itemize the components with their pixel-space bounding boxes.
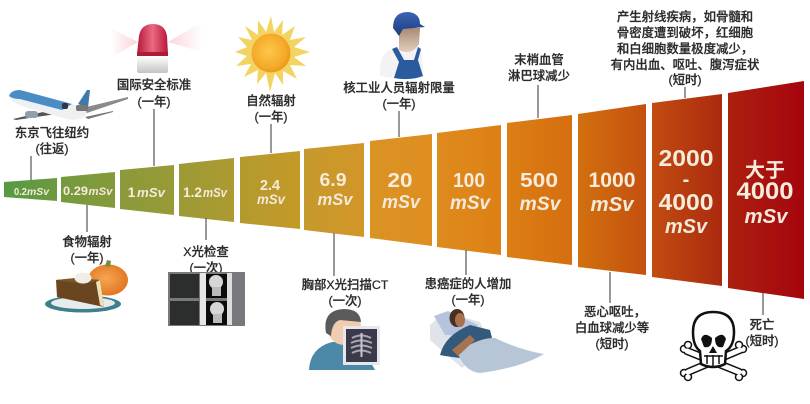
bar: 6.9 mSv: 6.9 <box>320 170 346 190</box>
label: nausea and white cell decrease: (短时) <box>595 337 629 351</box>
label: death: 死亡 <box>750 317 774 332</box>
label: radiation sickness description: 产生射线疾病，如骨髓和 <box>617 9 753 24</box>
label: nausea and white cell decrease <box>575 272 649 351</box>
bar: over 4000 mSv <box>728 81 804 299</box>
icon: X-ray lightbox <box>168 272 245 326</box>
bar: over 4000 mSv: mSv <box>744 206 789 228</box>
bar: 1.2 mSv: mSv <box>203 186 228 200</box>
label: chest CT scan <box>302 233 389 308</box>
label: peripheral blood lymphocyte decrease: 末梢血管 <box>514 52 564 67</box>
label: Tokyo to New York flight: (往返) <box>35 141 69 156</box>
bar: 0.29 mSv <box>61 172 115 208</box>
bar: 1000 mSv <box>578 104 646 275</box>
bar: 2000-4000 mSv: 2000 <box>658 145 714 171</box>
icon: sun <box>235 16 310 92</box>
label: radiation sickness description: (短时) <box>668 73 702 87</box>
label: nuclear worker limit <box>343 80 455 137</box>
label: death: (短时) <box>745 334 779 348</box>
bar: 20 mSv: 20 <box>388 170 412 192</box>
bar: 6.9 mSv: mSv <box>318 191 353 209</box>
bar: over 4000 mSv: 大于 <box>745 159 785 182</box>
bar: 2.4 mSv <box>240 151 300 229</box>
bar: 1000 mSv: 1000 <box>588 169 636 192</box>
label: death <box>745 293 779 348</box>
bar: 2000-4000 mSv: 4000 <box>658 189 714 215</box>
bar: 500 mSv: 500 <box>520 170 558 192</box>
label: Tokyo to New York flight: 东京飞往纽约 <box>15 125 89 140</box>
icon: red alarm beacon <box>110 22 202 73</box>
dose scale bars <box>4 81 804 299</box>
bar: 500 mSv <box>507 115 572 265</box>
bar: 100 mSv: 100 <box>453 170 485 192</box>
label: cancer patients increase: 患癌症的人增加 <box>425 276 511 291</box>
bar: 2.4 mSv: mSv <box>257 191 286 207</box>
bar: 0.2 mSv: mSv <box>27 187 50 198</box>
label: X-ray examination: X光检查 <box>183 244 229 259</box>
bar: 500 mSv: mSv <box>520 194 562 215</box>
icon: patient in bed <box>430 309 544 373</box>
bar: 2000-4000 mSv: mSv <box>665 216 709 238</box>
label: chest CT scan: (一次) <box>328 293 362 308</box>
bar: 1 mSv: mSv <box>137 185 166 200</box>
bar: 1 mSv: 1 <box>128 184 136 200</box>
bar: 1.2 mSv: 1.2 <box>183 184 202 200</box>
label: nuclear worker limit: (一年) <box>382 97 416 111</box>
label: natural radiation: 自然辐射 <box>246 93 296 108</box>
bar: 2.4 mSv: 2.4 <box>260 178 280 194</box>
bar: 20 mSv <box>370 134 432 246</box>
bar: 0.2 mSv <box>4 178 57 201</box>
label: radiation sickness description: 骨密度遭到破坏，红细胞 <box>617 25 753 40</box>
icon: nuclear worker <box>380 12 425 79</box>
bar: 100 mSv: mSv <box>450 193 491 214</box>
bar: 20 mSv: mSv <box>382 192 421 212</box>
label: X-ray examination: (一次) <box>189 260 223 275</box>
bar: over 4000 mSv: 4000 <box>736 178 794 205</box>
label: radiation sickness description <box>611 9 760 98</box>
bar: 2000-4000 mSv <box>652 94 722 286</box>
label: cancer patients increase <box>425 250 511 307</box>
label: cancer patients increase: (一年) <box>451 293 485 307</box>
label: international safety standard: (一年) <box>137 95 171 109</box>
label: nausea and white cell decrease: 恶心呕吐， <box>584 305 646 319</box>
label: nuclear worker limit: 核工业人员辐射限量 <box>343 80 455 95</box>
icon: skull and crossbones <box>680 312 746 380</box>
bar: 1 mSv <box>120 165 174 215</box>
label: radiation sickness description: 和白细胞数量极度减少， <box>617 41 753 56</box>
icon: airplane <box>9 90 128 120</box>
bar: 1000 mSv: mSv <box>590 194 635 216</box>
label: international safety standard <box>117 77 191 166</box>
bar: 0.29 mSv: 0.29 <box>63 184 88 198</box>
label: radiation sickness description: 有内出血、呕吐、腹泻症状 <box>611 57 760 72</box>
icon: person with chest X-ray <box>309 309 380 370</box>
label: food radiation: 食物辐射 <box>62 234 112 249</box>
bar: 6.9 mSv <box>304 143 364 237</box>
label: chest CT scan: 胸部X光扫描CT <box>302 277 389 292</box>
bar: 0.2 mSv: 0.2 <box>14 186 27 198</box>
label: Tokyo to New York flight <box>15 125 89 180</box>
label: peripheral blood lymphocyte decrease <box>508 52 570 118</box>
bar: 100 mSv <box>437 125 501 255</box>
bar: 0.29 mSv: mSv <box>88 186 113 198</box>
label: food radiation: (一年) <box>70 251 104 265</box>
label: international safety standard: 国际安全标准 <box>117 77 191 92</box>
label: natural radiation <box>246 93 296 153</box>
label: food radiation <box>62 205 112 265</box>
bar: 1.2 mSv <box>179 158 234 222</box>
label: peripheral blood lymphocyte decrease: 淋巴球减少 <box>508 68 570 83</box>
label: X-ray examination <box>183 218 229 275</box>
label: natural radiation: (一年) <box>254 110 288 124</box>
bar: 2000-4000 mSv: - <box>683 169 689 191</box>
icon: pie and pumpkin <box>45 260 128 312</box>
label: nausea and white cell decrease: 白血球减少等 <box>575 320 649 335</box>
